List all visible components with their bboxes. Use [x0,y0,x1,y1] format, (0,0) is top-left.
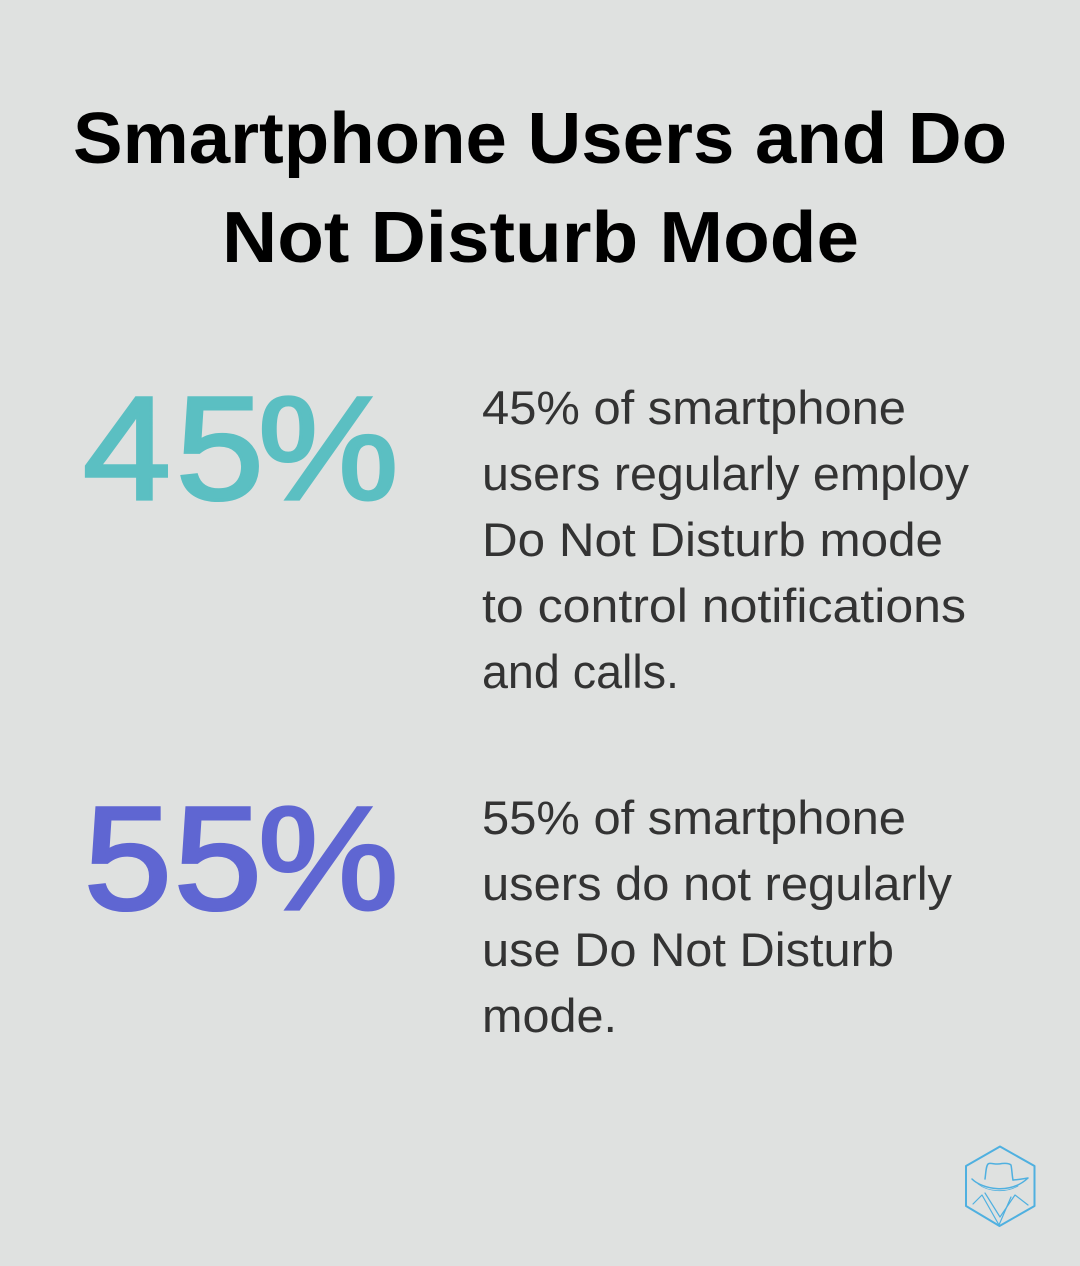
statistic: 45%: 45% [83,367,398,531]
description: 55% of users: users do not regularly [482,857,953,910]
statistic: 55%: 55% [84,777,398,941]
description: 45% of users: 45% of smartphone [482,381,906,434]
icon: hexagon logo with hat and collar [966,1146,1034,1226]
description: 45% of users [482,381,970,698]
title: Smartphone Users and Do [73,99,1007,179]
description: 45% of users: and calls. [482,645,679,698]
description: 45% of users: to control notifications [482,579,966,632]
description: 55% of users: mode. [482,989,617,1042]
description: 45% of users: Do Not Disturb mode [482,513,943,566]
description: 55% of users: use Do Not Disturb [482,923,894,976]
description: 55% of users [482,791,953,1042]
description: 55% of users: 55% of smartphone [482,791,906,844]
description: 45% of users: users regularly employ [482,447,970,500]
title: Not Disturb Mode [222,198,859,278]
title [73,99,1007,278]
